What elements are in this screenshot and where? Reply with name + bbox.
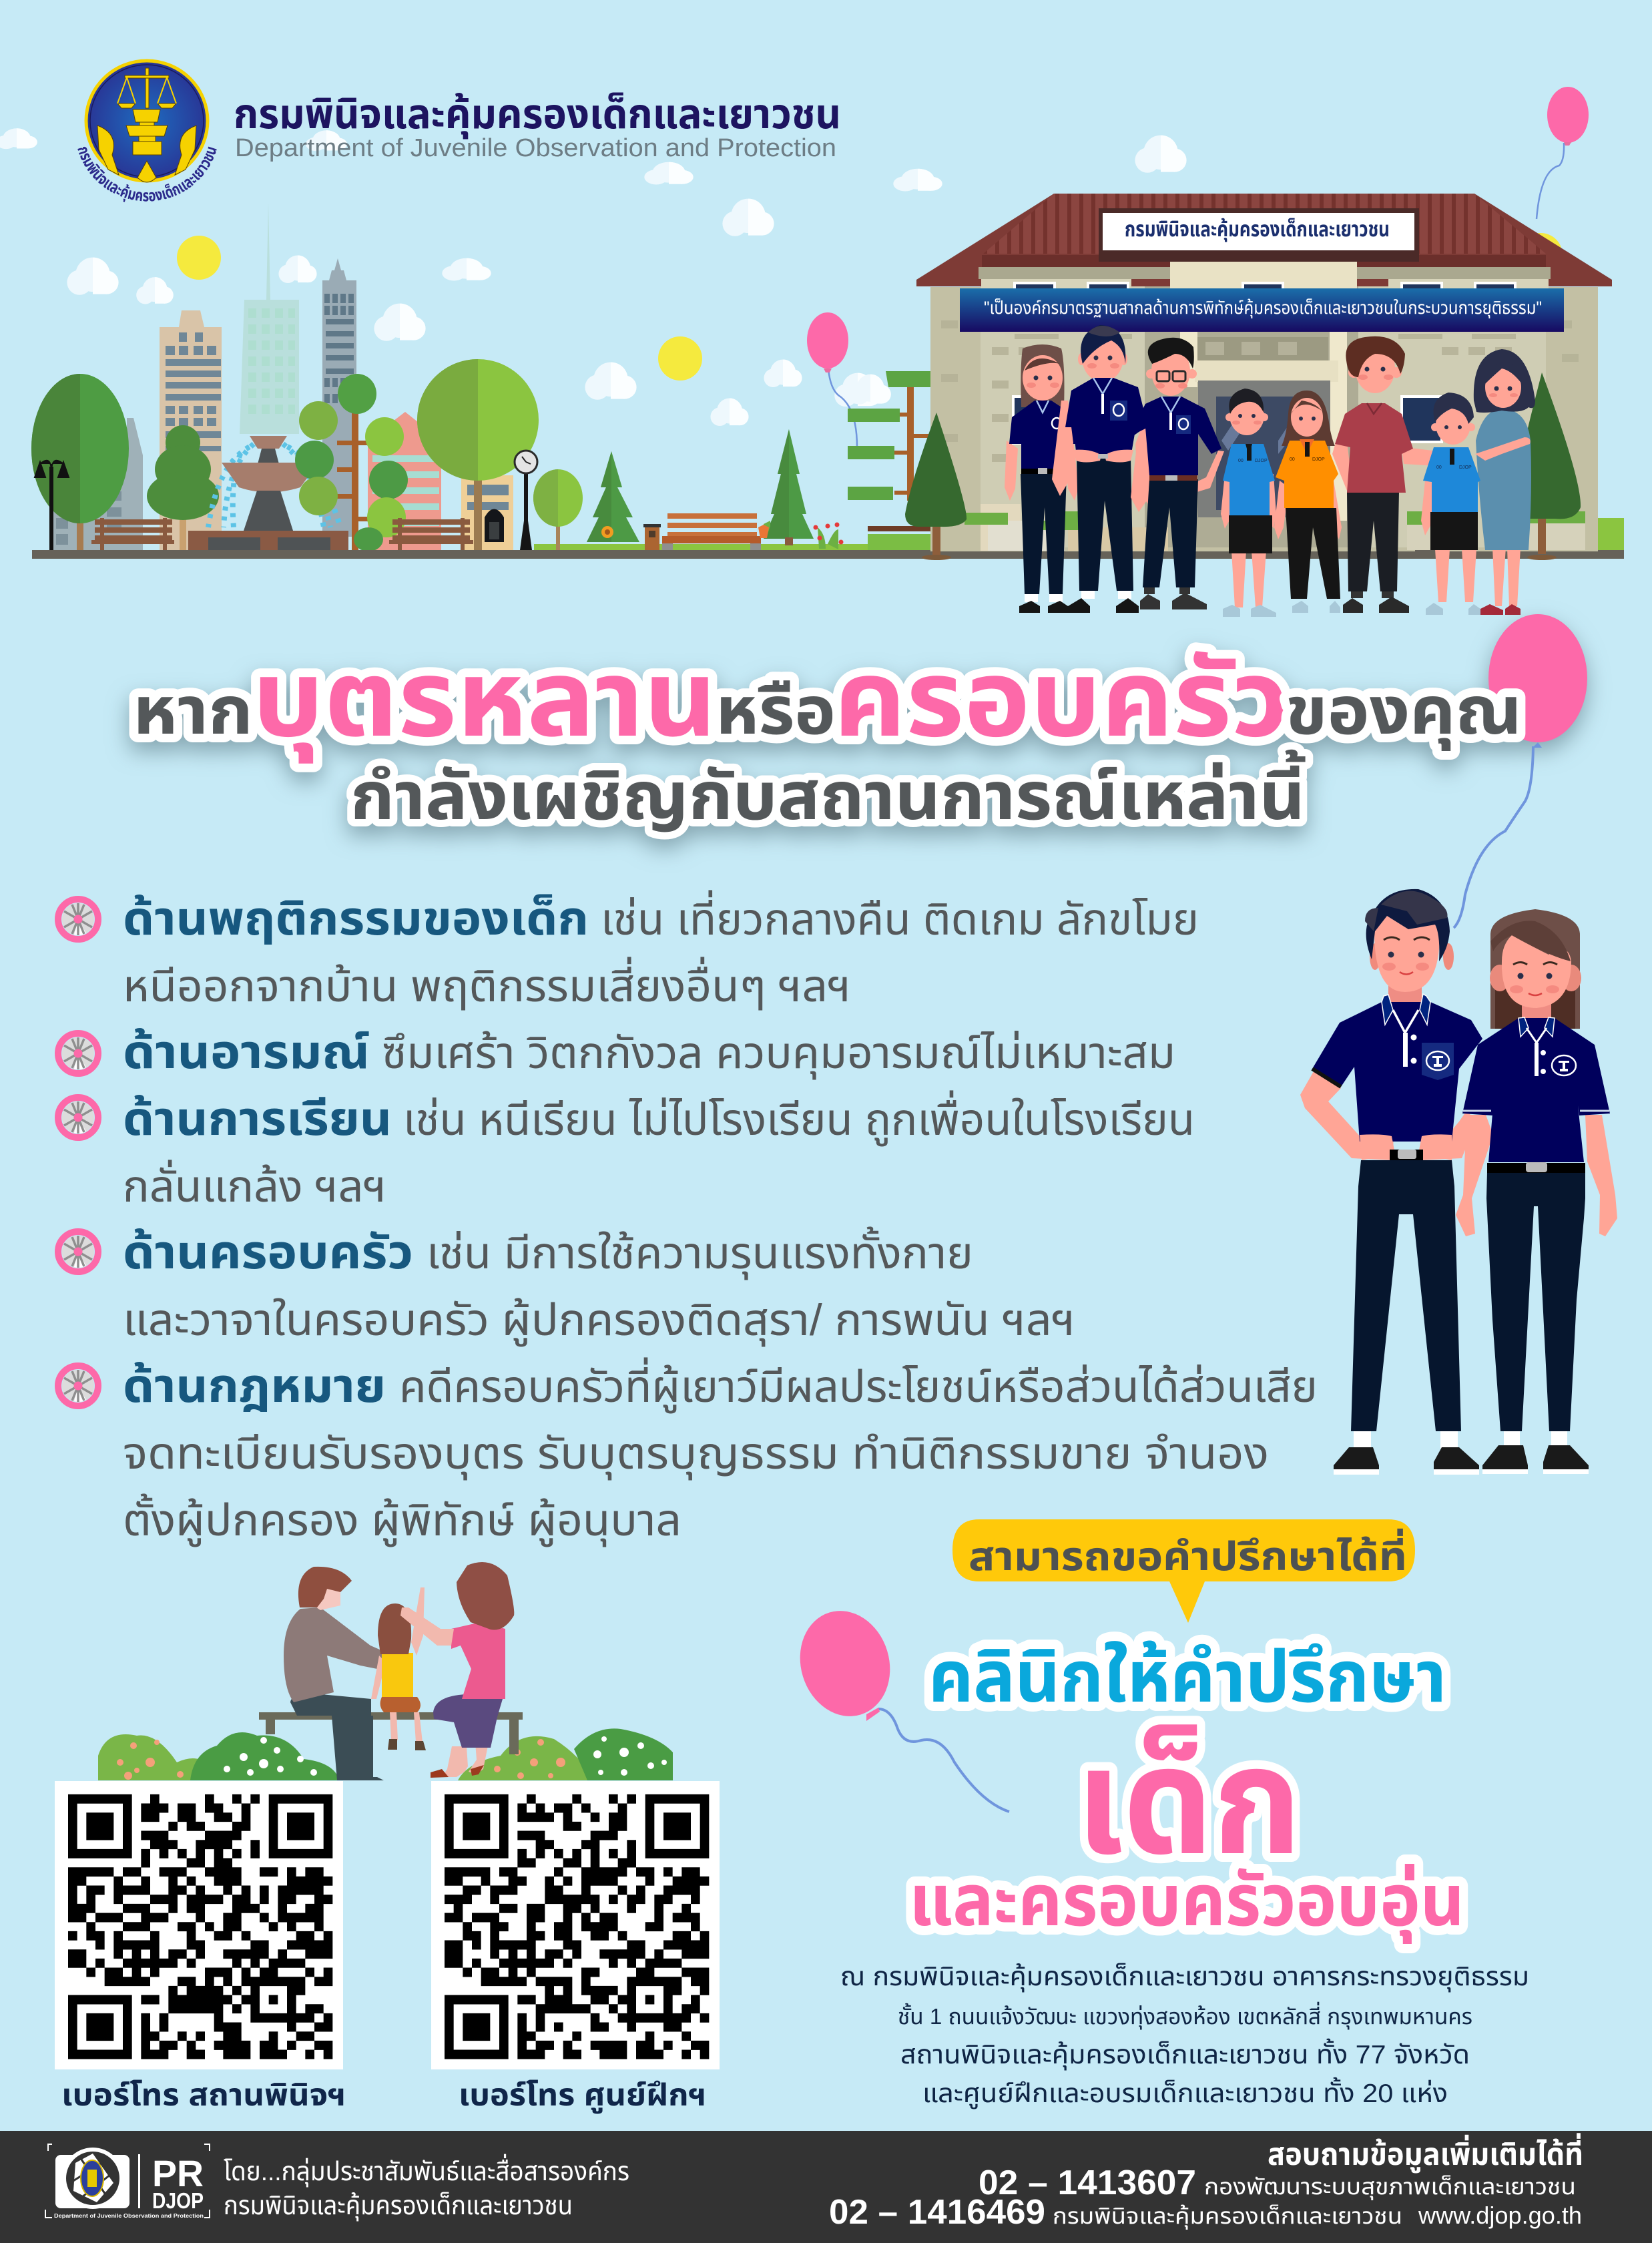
QR caption: observation centre phone: เบอร์โทร สถานพินิจฯ: [61, 2077, 346, 2112]
footer contact: www.djop.go.th: [1418, 2202, 1582, 2229]
bench: [91, 518, 174, 550]
callout text: สามารถขอคำปรึกษาได้ที่: [969, 1528, 1407, 1579]
QR caption: training centre phone: เบอร์โทร ศูนย์ฝึกฯ: [459, 2077, 706, 2113]
item: study: [58, 1090, 1195, 1211]
footer contact: กองพัฒนาระบบสุขภาพเด็กและเยาวชน: [1204, 2174, 1576, 2200]
footer contact: สอบถามข้อมูลเพิ่มเติมได้ที่: [1268, 2133, 1583, 2173]
footer contact: 02 – 1416469: [829, 2193, 1045, 2232]
portico: [1170, 255, 1357, 290]
icon: department emblem: [77, 59, 217, 202]
boy blue 2: 00: [1436, 465, 1442, 470]
footer logo: PR: [152, 2152, 204, 2194]
address text: ณ กรมพินิจและคุ้มครองเด็กและเยาวชน อาคารกระทรวงยุติธรรม: [840, 1963, 1529, 1992]
mother: [400, 1562, 514, 1778]
towers: [240, 203, 299, 434]
item: family: และวาจาในครอบครัว ผู้ปกครองติดสุรา/ การพนัน ฯลฯ: [123, 1295, 1075, 1347]
clouds: [0, 128, 1187, 426]
daughter: [371, 1587, 426, 1750]
boy blue 2: DJOP: [1459, 465, 1472, 470]
item: behaviour: หนีออกจากบ้าน พฤติกรรมเสี่ยงอื่นๆ ฯลฯ: [123, 957, 851, 1011]
banner: [960, 288, 1564, 332]
footer credit: โดย...กลุ่มประชาสัมพันธ์และสื่อสารองค์กร: [224, 2154, 629, 2187]
address text: [840, 1963, 1529, 2109]
item: behaviour: เช่น เที่ยวกลางคืน ติดเกม ลักขโมย: [601, 890, 1199, 944]
woman teal: [1474, 349, 1535, 615]
heading line 1: ของคุณ: [1286, 674, 1522, 751]
girl orange: DJOP: [1312, 457, 1325, 462]
boy blue: DJOP: [1255, 459, 1268, 463]
footer bar: [0, 2131, 1652, 2243]
footer contact: [829, 2133, 1583, 2232]
big tree: [474, 467, 482, 550]
illustration: staff and family group: [1005, 325, 1535, 617]
boy blue: 00: [1238, 459, 1244, 463]
address text: และศูนย์ฝึกและอบรมเด็กและเยาวชน ทั้ง 20 แห่ง: [922, 2077, 1448, 2109]
light tree: [556, 514, 560, 550]
banner text: "เป็นองค์กรมาตรฐานสากลด้านการพิทักษ์คุ้มครองเด็กและเยาวชนในกระบวนการยุติธรรม": [984, 298, 1542, 318]
footer logo: DJOP: [152, 2188, 204, 2213]
bin brown: [645, 524, 659, 550]
title: department name English: Department of Juvenile Observation and Protection: [235, 134, 836, 162]
item: law: จดทะเบียนรับรองบุตร รับบุตรบุญธรรม ทำนิติกรรมขาย จำนอง: [123, 1429, 1269, 1480]
illustration: staff couple: [1300, 889, 1617, 1475]
balloon: lower: [787, 1599, 1009, 1812]
grass: [534, 544, 868, 550]
heading: warm family: และครอบครัวอบอุ่น: [909, 1860, 1464, 1944]
left tree: [77, 494, 83, 550]
walls: [930, 287, 1598, 551]
title: department name Thai: กรมพินิจและคุ้มครองเด็กและเยาวชน: [234, 91, 841, 139]
illustration: juvenile centre building: [848, 194, 1624, 560]
illustration: city park: [31, 203, 1624, 559]
man: [1300, 889, 1482, 1475]
bench: [259, 1712, 523, 1754]
bench: [389, 518, 473, 550]
item: family: ด้านครอบครัว: [123, 1226, 413, 1278]
footer credit: กรมพินิจและคุ้มครองเด็กและเยาวชน: [224, 2192, 573, 2221]
boy blue 2: [1421, 393, 1480, 615]
trees by building: [1538, 514, 1546, 554]
heading line 1: หรือ: [716, 674, 836, 748]
callout: speech bubble: [952, 1519, 1415, 1623]
list: situations: [58, 890, 1318, 1547]
shrub: [764, 521, 838, 549]
item: study: กลั่นแกล้ง ฯลฯ: [123, 1160, 386, 1211]
small pad tree: [894, 385, 930, 501]
roof: [916, 194, 1612, 286]
item: behaviour: [58, 890, 1199, 1011]
heading line 1: หาก: [133, 674, 253, 748]
clock: [524, 473, 528, 550]
item: law: ด้านกฎหมาย: [123, 1360, 386, 1412]
item: family: เช่น มีการใช้ความรุนแรงทั้งกาย: [427, 1226, 973, 1280]
heading line 1: บุตรหลาน: [252, 639, 717, 764]
sign text: กรมพินิจและคุ้มครองเด็กและเยาวชน: [1125, 217, 1390, 242]
father: [284, 1567, 408, 1780]
girl orange: 00: [1290, 457, 1295, 462]
item: family: [58, 1226, 1075, 1347]
heading: clinic: คลินิกให้คำปรึกษา: [928, 1636, 1446, 1717]
address text: ชั้น 1 ถนนแจ้งวัฒนะ แขวงทุ่งสองห้อง เขตหลักสี่ กรุงเทพมหานคร: [898, 2001, 1472, 2030]
balloon behind headline: [1488, 614, 1587, 742]
sign: [1099, 208, 1419, 262]
item: study: ด้านการเรียน: [123, 1093, 392, 1145]
door: [1198, 381, 1330, 517]
round tree: [180, 494, 186, 550]
pole with foliage: [337, 395, 378, 550]
item: behaviour: ด้านพฤติกรรมของเด็ก: [123, 893, 589, 945]
heading: children: เด็ก: [1076, 1717, 1302, 1885]
illustration: family on bench: [98, 1562, 673, 1780]
footer logo: [45, 2144, 210, 2219]
item: emotion: [58, 1026, 1175, 1079]
QR code: observation centre: [55, 1781, 343, 2069]
footer contact: 02 – 1413607: [979, 2164, 1196, 2202]
bushes: [98, 1728, 673, 1780]
balloon: top right: [1537, 87, 1589, 219]
item: emotion: ด้านอารมณ์: [123, 1026, 370, 1078]
balloon string: [1454, 742, 1542, 928]
footer logo: Department of Juvenile Observation and Protection: [54, 2213, 204, 2219]
man glasses: [1131, 338, 1224, 609]
man navy: [1052, 325, 1153, 613]
fountain: [208, 441, 340, 527]
address text: สถานพินิจและคุ้มครองเด็กและเยาวชน ทั้ง 77 จังหวัด: [900, 2038, 1470, 2070]
item: law: [58, 1357, 1318, 1547]
item: law: คดีครอบครัวที่ผู้เยาว์มีผลประโยชน์หรือส่วนได้ส่วนเสีย: [399, 1357, 1318, 1414]
item: emotion: ซึมเศร้า วิตกกังวล ควบคุมอารมณ์ไม่เหมาะสม: [382, 1028, 1175, 1079]
item: study: เช่น หนีเรียน ไม่ไปโรงเรียน ถูกเพื่อนในโรงเรียน: [403, 1090, 1195, 1147]
footer credit: [224, 2154, 629, 2221]
orange bench: [667, 513, 757, 537]
QR code: training centre: [431, 1781, 720, 2069]
heading line 1: ครอบครัว: [834, 639, 1289, 758]
balloon: middle: [807, 312, 857, 447]
pines: [587, 451, 639, 542]
heading line 1: [133, 639, 1522, 764]
man red: [1332, 336, 1449, 613]
woman navy: [1005, 344, 1079, 613]
footer contact: กรมพินิจและคุ้มครองเด็กและเยาวชน: [1053, 2204, 1402, 2230]
bin: [485, 509, 504, 542]
heading line 2: กำลังเผชิญกับสถานการณ์เหล่านี้: [350, 750, 1306, 834]
street lamp: [35, 461, 69, 550]
woman: [1456, 909, 1617, 1474]
ground left part: [32, 550, 1624, 559]
icon: department emblem: กรมพินิจและคุ้มครองเด็กและเยาวชน: [77, 147, 217, 202]
headline block: [133, 614, 1587, 834]
item: law: ตั้งผู้ปกครอง ผู้พิทักษ์ ผู้อนุบาล: [123, 1493, 681, 1547]
girl orange: [1274, 391, 1342, 613]
upper windows: [1013, 283, 1515, 443]
boy blue: [1221, 389, 1276, 617]
